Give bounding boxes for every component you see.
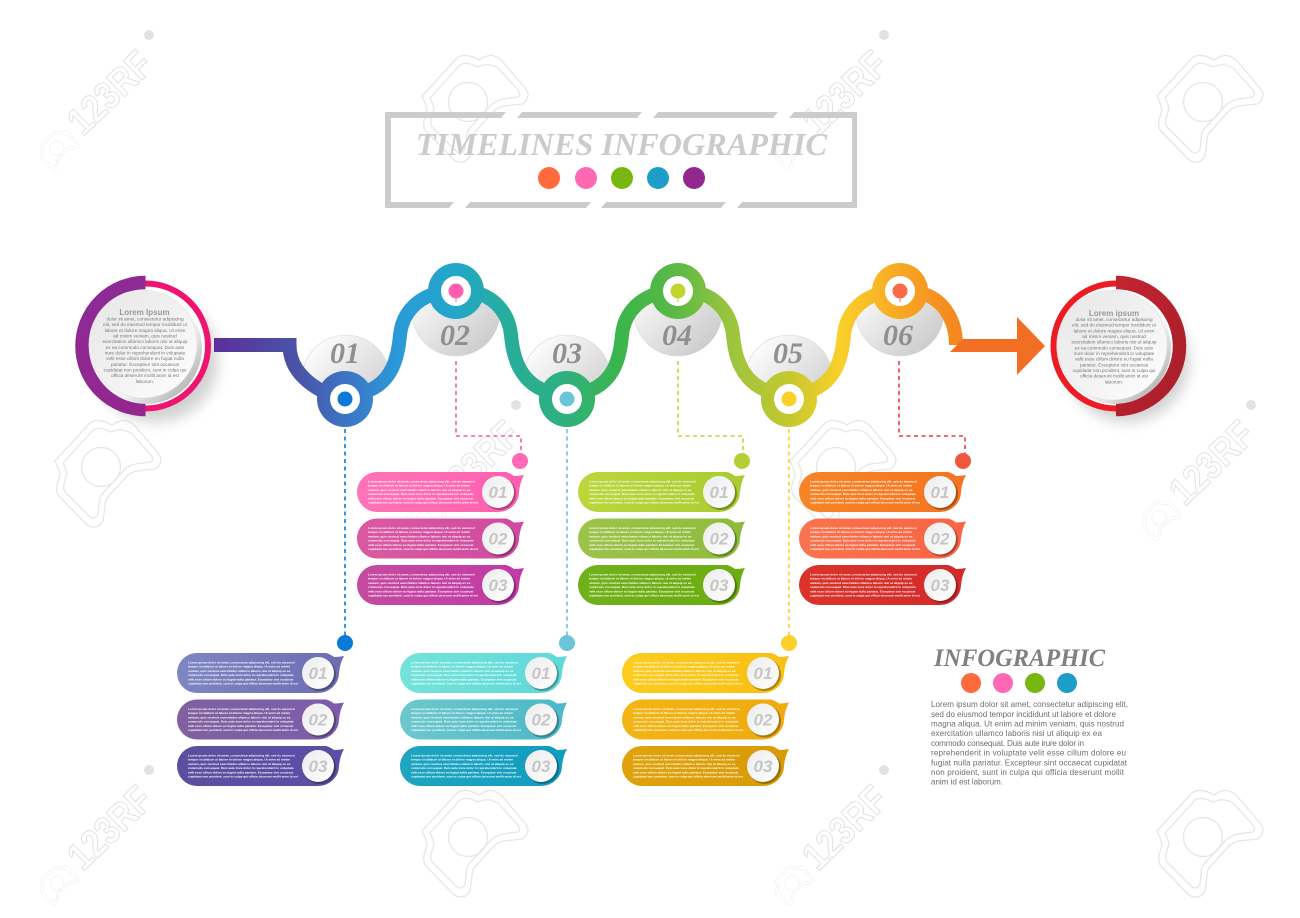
pill group: step 06 orange: veniam, quis nostrud exercitation ullamco laboris nisi ut aliquip ex ea	[810, 534, 913, 538]
pill group: step 04 green: cupidatat non proident, sunt in culpa qui officia deserunt mollit anim id est	[589, 500, 699, 504]
pill group: step 01 purple: commodo consequat. Duis aute irure dolor in reprehenderit in voluptate	[188, 766, 294, 770]
pill group: step 04 green: veniam, quis nostrud exercitation ullamco laboris nisi ut aliquip ex ea	[589, 534, 692, 538]
title colour dots	[538, 167, 705, 189]
infographic body text	[931, 700, 1128, 787]
end circle panel: Lorem ipsum	[1089, 309, 1139, 318]
step numbers	[330, 319, 913, 370]
pill group: step 06 orange: 03	[931, 576, 950, 595]
pill group: step 05 yellow: 01	[754, 664, 772, 683]
start circle panel: Lorem Ipsum	[119, 308, 170, 317]
pill group: step 02 pink: tempor incididunt ut labore et dolore magna aliqua. Ut enim ad minim	[368, 484, 470, 488]
pill group: step 02 pink: velit esse cillum dolore eu fugiat nulla pariatur. Excepteur sint occaecat	[368, 589, 473, 593]
pill group: step 05 yellow: cupidatat non proident, sunt in culpa qui officia deserunt mollit anim id est	[633, 728, 743, 732]
pill group: step 01 purple: Lorem ipsum dolor sit amet, consectetur adipiscing elit, sed do eiusmod	[188, 707, 295, 711]
pill group: step 03 teal: Lorem ipsum dolor sit amet, consectetur adipiscing elit, sed do eiusmod	[411, 707, 518, 711]
pill group: step 04 green: Lorem ipsum dolor sit amet, consectetur adipiscing elit, sed do eiusmod	[589, 572, 696, 576]
infographic body text: sed do eiusmod tempor incididunt ut labore et dolore	[931, 710, 1116, 719]
pill group: step 05 yellow: 03	[754, 757, 773, 776]
number discs	[304, 302, 944, 383]
pill group: step 01 purple: cupidatat non proident, sunt in culpa qui officia deserunt mollit anim id est	[188, 728, 298, 732]
pill group: step 03 teal: velit esse cillum dolore eu fugiat nulla pariatur. Excepteur sint occaecat	[411, 677, 516, 681]
start circle panel: labore et dolore magna aliqua. Ut enim	[105, 328, 185, 333]
pill group: step 02 pink: 01	[489, 483, 507, 502]
start circle panel: officia deserunt mollit anim id est	[111, 373, 180, 378]
pill group: step 03 teal: Lorem ipsum dolor sit amet, consectetur adipiscing elit, sed do eiusmod	[411, 754, 518, 758]
pill group: step 03 teal	[400, 653, 567, 786]
pill group: step 04 green: commodo consequat. Duis aute irure dolor in reprehenderit in voluptate	[589, 492, 695, 496]
pill group: step 05 yellow: commodo consequat. Duis aute irure dolor in reprehenderit in voluptate	[633, 673, 739, 677]
timeline nodes	[317, 263, 928, 427]
pill group: step 04 green: veniam, quis nostrud exercitation ullamco laboris nisi ut aliquip ex ea	[589, 581, 692, 585]
pill group: step 03 teal: Lorem ipsum dolor sit amet, consectetur adipiscing elit, sed do eiusmod	[411, 660, 518, 664]
step numbers: 02	[440, 319, 470, 352]
end circle panel: ad minim veniam, quis nostrud	[1082, 334, 1146, 339]
pill group: step 06 orange	[799, 472, 966, 605]
pill group: step 03 teal: 02	[532, 710, 551, 730]
pill group: step 04 green: tempor incididunt ut labore et dolore magna aliqua. Ut enim ad minim	[589, 484, 691, 488]
start circle panel: velit esse cillum dolore eu fugiat nulla	[106, 356, 184, 361]
pill group: step 01 purple: cupidatat non proident, sunt in culpa qui officia deserunt mollit anim id est	[188, 682, 298, 686]
start circle panel: ex ea commodo consequat. Duis aute	[106, 345, 185, 350]
pill group: step 02 pink: cupidatat non proident, sunt in culpa qui officia deserunt mollit anim id est	[368, 500, 478, 504]
pill group: step 03 teal: tempor incididunt ut labore et dolore magna aliqua. Ut enim ad minim	[411, 665, 513, 669]
pill group: step 06 orange: tempor incididunt ut labore et dolore magna aliqua. Ut enim ad minim	[810, 577, 912, 581]
pill group: step 06 orange: veniam, quis nostrud exercitation ullamco laboris nisi ut aliquip ex ea	[810, 488, 913, 492]
pill group: step 04 green: commodo consequat. Duis aute irure dolor in reprehenderit in voluptate	[589, 539, 695, 543]
pill group: step 06 orange: velit esse cillum dolore eu fugiat nulla pariatur. Excepteur sint occaecat	[810, 543, 915, 547]
pill group: step 02 pink: veniam, quis nostrud exercitation ullamco laboris nisi ut aliquip ex ea	[368, 488, 471, 492]
title: TIMELINES INFOGRAPHIC	[416, 126, 828, 162]
pill group: step 02 pink	[357, 472, 524, 605]
start circle panel: dolor sit amet, consectetur adipiscing	[106, 316, 184, 322]
infographic body text: anim id est laborum.	[931, 778, 1003, 787]
pill group: step 06 orange: Lorem ipsum dolor sit amet, consectetur adipiscing elit, sed do eiusmod	[810, 526, 917, 530]
pill group: step 05 yellow: veniam, quis nostrud exercitation ullamco laboris nisi ut aliquip ex ea	[633, 669, 736, 673]
step numbers: 01	[330, 337, 360, 370]
pill group: step 04 green: tempor incididunt ut labore et dolore magna aliqua. Ut enim ad minim	[589, 577, 691, 581]
end circle panel: laborum.	[1105, 379, 1123, 384]
pill group: step 06 orange: 02	[931, 530, 950, 548]
pill group: step 05 yellow: velit esse cillum dolore eu fugiat nulla pariatur. Excepteur sint occaecat	[633, 677, 738, 681]
start circle panel: irure dolor in reprehenderit in voluptate	[105, 351, 186, 356]
pill group: step 02 pink: velit esse cillum dolore eu fugiat nulla pariatur. Excepteur sint occaecat	[368, 543, 473, 547]
pill group: step 05 yellow: commodo consequat. Duis aute irure dolor in reprehenderit in voluptate	[633, 766, 739, 770]
pill group: step 01 purple: tempor incididunt ut labore et dolore magna aliqua. Ut enim ad minim	[188, 758, 290, 762]
pill group: step 05 yellow: tempor incididunt ut labore et dolore magna aliqua. Ut enim ad minim	[633, 665, 735, 669]
pill group: step 06 orange: commodo consequat. Duis aute irure dolor in reprehenderit in voluptate	[810, 492, 916, 496]
pill group: step 03 teal: velit esse cillum dolore eu fugiat nulla pariatur. Excepteur sint occaecat	[411, 770, 516, 774]
arrow	[950, 317, 1045, 375]
pill group: step 04 green: 03	[710, 576, 729, 595]
start circle panel	[82, 282, 218, 422]
pill group: step 03 teal: veniam, quis nostrud exercitation ullamco laboris nisi ut aliquip ex ea	[411, 669, 514, 673]
pill group: step 06 orange: commodo consequat. Duis aute irure dolor in reprehenderit in voluptate	[810, 539, 916, 543]
pill group: step 05 yellow: cupidatat non proident, sunt in culpa qui officia deserunt mollit anim id est	[633, 682, 743, 686]
end circle panel: cupidatat non proident, sunt in culpa qui	[1073, 368, 1155, 373]
start circle panel: cupidatat non proident, sunt in culpa qui	[104, 368, 186, 373]
pill group: step 05 yellow: velit esse cillum dolore eu fugiat nulla pariatur. Excepteur sint occaecat	[633, 724, 738, 728]
step numbers: 04	[662, 319, 692, 352]
pill group: step 01 purple: veniam, quis nostrud exercitation ullamco laboris nisi ut aliquip ex ea	[188, 762, 291, 766]
pill group: step 02 pink: veniam, quis nostrud exercitation ullamco laboris nisi ut aliquip ex ea	[368, 534, 471, 538]
pill group: step 03 teal: cupidatat non proident, sunt in culpa qui officia deserunt mollit anim id est	[411, 728, 521, 732]
pill group: step 03 teal: veniam, quis nostrud exercitation ullamco laboris nisi ut aliquip ex ea	[411, 762, 514, 766]
pill group: step 06 orange: velit esse cillum dolore eu fugiat nulla pariatur. Excepteur sint occaecat	[810, 496, 915, 500]
pill group: step 04 green	[578, 472, 745, 605]
pill group: step 03 teal: tempor incididunt ut labore et dolore magna aliqua. Ut enim ad minim	[411, 711, 513, 715]
pill group: step 04 green: Lorem ipsum dolor sit amet, consectetur adipiscing elit, sed do eiusmod	[589, 526, 696, 530]
start circle panel: elit, sed do eiusmod tempor incididunt ut	[103, 322, 188, 327]
step numbers: 03	[552, 337, 582, 370]
infographic body text: exercitation ullamco laboris nisi ut aliquip ex ea	[931, 729, 1102, 738]
pill group: step 02 pink: Lorem ipsum dolor sit amet, consectetur adipiscing elit, sed do eiusmod	[368, 480, 475, 484]
pill group: step 02 pink: commodo consequat. Duis aute irure dolor in reprehenderit in voluptate	[368, 492, 474, 496]
step numbers: 05	[773, 337, 803, 370]
pill group: step 05 yellow: commodo consequat. Duis aute irure dolor in reprehenderit in voluptate	[633, 720, 739, 724]
end circle panel: dolor sit amet, consectetur adipiscing	[1075, 317, 1153, 322]
infographic body text: Lorem ipsum dolor sit amet, consectetur adipiscing elit,	[931, 700, 1128, 709]
end circle panel: velit esse cillum dolore eu fugiat nulla	[1075, 357, 1153, 362]
pill group: step 04 green: tempor incididunt ut labore et dolore magna aliqua. Ut enim ad minim	[589, 530, 691, 534]
wavy timeline	[214, 294, 956, 391]
pill group: step 03 teal: tempor incididunt ut labore et dolore magna aliqua. Ut enim ad minim	[411, 758, 513, 762]
pill group: step 05 yellow: velit esse cillum dolore eu fugiat nulla pariatur. Excepteur sint occaecat	[633, 770, 738, 774]
pill group: step 01 purple: 02	[309, 710, 328, 730]
pill group: step 04 green: cupidatat non proident, sunt in culpa qui officia deserunt mollit anim id est	[589, 547, 699, 551]
pill group: step 01 purple: cupidatat non proident, sunt in culpa qui officia deserunt mollit anim id est	[188, 774, 298, 778]
end circle panel	[1054, 282, 1189, 422]
pill group: step 04 green: velit esse cillum dolore eu fugiat nulla pariatur. Excepteur sint occaecat	[589, 589, 694, 593]
pill group: step 06 orange: veniam, quis nostrud exercitation ullamco laboris nisi ut aliquip ex ea	[810, 581, 913, 585]
end circle panel: irure dolor in reprehenderit in voluptate	[1074, 351, 1155, 356]
pill group: step 04 green: veniam, quis nostrud exercitation ullamco laboris nisi ut aliquip ex ea	[589, 488, 692, 492]
end circle panel: labore et dolore magna aliqua. Ut enim	[1074, 328, 1154, 333]
pill group: step 05 yellow	[622, 653, 789, 786]
pill group: step 06 orange: velit esse cillum dolore eu fugiat nulla pariatur. Excepteur sint occaecat	[810, 589, 915, 593]
infographic body text: commodo consequat. Duis aute irure dolor in	[931, 739, 1084, 748]
pill group: step 06 orange: cupidatat non proident, sunt in culpa qui officia deserunt mollit anim id est	[810, 547, 920, 551]
start circle panel: ad minim veniam, quis nostrud	[113, 334, 177, 339]
pill group: step 06 orange: cupidatat non proident, sunt in culpa qui officia deserunt mollit anim id est	[810, 594, 920, 598]
pill group: step 05 yellow: tempor incididunt ut labore et dolore magna aliqua. Ut enim ad minim	[633, 758, 735, 762]
infographic heading: INFOGRAPHIC	[933, 645, 1105, 672]
pill group: step 01 purple	[177, 653, 344, 786]
pill group: step 01 purple: commodo consequat. Duis aute irure dolor in reprehenderit in voluptate	[188, 673, 294, 677]
pill group: step 06 orange: tempor incididunt ut labore et dolore magna aliqua. Ut enim ad minim	[810, 484, 912, 488]
title frame	[385, 112, 857, 208]
pill group: step 06 orange: tempor incididunt ut labore et dolore magna aliqua. Ut enim ad minim	[810, 530, 912, 534]
pill group: step 06 orange: commodo consequat. Duis aute irure dolor in reprehenderit in voluptate	[810, 585, 916, 589]
pill group: step 05 yellow: cupidatat non proident, sunt in culpa qui officia deserunt mollit anim id est	[633, 774, 743, 778]
pill group: step 04 green: cupidatat non proident, sunt in culpa qui officia deserunt mollit anim id est	[589, 594, 699, 598]
pill group: step 05 yellow: tempor incididunt ut labore et dolore magna aliqua. Ut enim ad minim	[633, 711, 735, 715]
pill group: step 01 purple: 03	[309, 757, 328, 776]
pill group: step 02 pink: Lorem ipsum dolor sit amet, consectetur adipiscing elit, sed do eiusmod	[368, 526, 475, 530]
pill group: step 02 pink: veniam, quis nostrud exercitation ullamco laboris nisi ut aliquip ex ea	[368, 581, 471, 585]
pill group: step 04 green: 02	[710, 530, 729, 548]
pill group: step 01 purple: tempor incididunt ut labore et dolore magna aliqua. Ut enim ad minim	[188, 711, 290, 715]
pill group: step 01 purple: tempor incididunt ut labore et dolore magna aliqua. Ut enim ad minim	[188, 665, 290, 669]
pill group: step 01 purple: velit esse cillum dolore eu fugiat nulla pariatur. Excepteur sint occaecat	[188, 677, 293, 681]
pill group: step 06 orange: 01	[931, 483, 949, 502]
dashed connectors	[337, 361, 971, 651]
infographic body text: reprehenderit in voluptate velit esse cillum dolore eu	[931, 749, 1126, 758]
start circle panel: exercitation ullamco laboris nisi ut aliquip	[103, 339, 188, 344]
pill group: step 02 pink: cupidatat non proident, sunt in culpa qui officia deserunt mollit anim id est	[368, 594, 478, 598]
pill group: step 03 teal: cupidatat non proident, sunt in culpa qui officia deserunt mollit anim id est	[411, 682, 521, 686]
pill group: step 05 yellow: veniam, quis nostrud exercitation ullamco laboris nisi ut aliquip ex ea	[633, 715, 736, 719]
end circle panel: ex ea commodo consequat. Duis aute	[1075, 345, 1154, 350]
pill group: step 06 orange: Lorem ipsum dolor sit amet, consectetur adipiscing elit, sed do eiusmod	[810, 480, 917, 484]
end circle panel: officia deserunt mollit anim id est	[1080, 374, 1149, 379]
pill group: step 03 teal: veniam, quis nostrud exercitation ullamco laboris nisi ut aliquip ex ea	[411, 715, 514, 719]
pill group: step 03 teal: cupidatat non proident, sunt in culpa qui officia deserunt mollit anim id est	[411, 774, 521, 778]
pill group: step 05 yellow: Lorem ipsum dolor sit amet, consectetur adipiscing elit, sed do eiusmod	[633, 660, 740, 664]
pill group: step 02 pink: Lorem ipsum dolor sit amet, consectetur adipiscing elit, sed do eiusmod	[368, 572, 475, 576]
pill group: step 03 teal: commodo consequat. Duis aute irure dolor in reprehenderit in voluptate	[411, 766, 517, 770]
start circle panel: pariatur. Excepteur sint occaecat	[111, 362, 180, 367]
infographic body text: non proident, sunt in culpa qui officia deserunt mollit	[931, 768, 1125, 777]
infographic colour dots	[961, 673, 1077, 693]
end circle panel: elit, sed do eiusmod tempor incididunt ut	[1072, 323, 1157, 328]
pill group: step 02 pink: 02	[489, 530, 508, 548]
pill group: step 03 teal: velit esse cillum dolore eu fugiat nulla pariatur. Excepteur sint occaecat	[411, 724, 516, 728]
end circle panel: exercitation ullamco laboris nisi ut aliquip	[1072, 340, 1157, 345]
infographic body text: fugiat nulla pariatur. Excepteur sint occaecat cupidatat	[931, 758, 1128, 767]
pill group: step 01 purple: veniam, quis nostrud exercitation ullamco laboris nisi ut aliquip ex ea	[188, 669, 291, 673]
pill group: step 03 teal: 01	[532, 664, 550, 683]
end circle panel: pariatur. Excepteur sint occaecat	[1080, 362, 1149, 367]
pill group: step 03 teal: commodo consequat. Duis aute irure dolor in reprehenderit in voluptate	[411, 720, 517, 724]
pill group: step 04 green: velit esse cillum dolore eu fugiat nulla pariatur. Excepteur sint occaecat	[589, 543, 694, 547]
pill group: step 01 purple: veniam, quis nostrud exercitation ullamco laboris nisi ut aliquip ex ea	[188, 715, 291, 719]
pill group: step 02 pink: velit esse cillum dolore eu fugiat nulla pariatur. Excepteur sint occaecat	[368, 496, 473, 500]
pill group: step 02 pink: commodo consequat. Duis aute irure dolor in reprehenderit in voluptate	[368, 585, 474, 589]
pill group: step 05 yellow: Lorem ipsum dolor sit amet, consectetur adipiscing elit, sed do eiusmod	[633, 754, 740, 758]
pill group: step 02 pink: cupidatat non proident, sunt in culpa qui officia deserunt mollit anim id est	[368, 547, 478, 551]
pill group: step 02 pink: tempor incididunt ut labore et dolore magna aliqua. Ut enim ad minim	[368, 577, 470, 581]
pill group: step 01 purple: velit esse cillum dolore eu fugiat nulla pariatur. Excepteur sint occaecat	[188, 770, 293, 774]
pill group: step 01 purple: Lorem ipsum dolor sit amet, consectetur adipiscing elit, sed do eiusmod	[188, 660, 295, 664]
pill group: step 04 green: 01	[710, 483, 728, 502]
start circle panel: laborum.	[136, 379, 154, 384]
pill group: step 03 teal: commodo consequat. Duis aute irure dolor in reprehenderit in voluptate	[411, 673, 517, 677]
pill group: step 04 green: Lorem ipsum dolor sit amet, consectetur adipiscing elit, sed do eiusmod	[589, 480, 696, 484]
pill group: step 05 yellow: Lorem ipsum dolor sit amet, consectetur adipiscing elit, sed do eiusmod	[633, 707, 740, 711]
pill group: step 06 orange: cupidatat non proident, sunt in culpa qui officia deserunt mollit anim id est	[810, 500, 920, 504]
pill group: step 01 purple: velit esse cillum dolore eu fugiat nulla pariatur. Excepteur sint occaecat	[188, 724, 293, 728]
pill group: step 06 orange: Lorem ipsum dolor sit amet, consectetur adipiscing elit, sed do eiusmod	[810, 572, 917, 576]
pill group: step 05 yellow: veniam, quis nostrud exercitation ullamco laboris nisi ut aliquip ex ea	[633, 762, 736, 766]
pill group: step 02 pink: 03	[489, 576, 508, 595]
pill group: step 04 green: velit esse cillum dolore eu fugiat nulla pariatur. Excepteur sint occaecat	[589, 496, 694, 500]
pill group: step 02 pink: commodo consequat. Duis aute irure dolor in reprehenderit in voluptate	[368, 539, 474, 543]
pill group: step 01 purple: commodo consequat. Duis aute irure dolor in reprehenderit in voluptate	[188, 720, 294, 724]
pill group: step 02 pink: tempor incididunt ut labore et dolore magna aliqua. Ut enim ad minim	[368, 530, 470, 534]
pill group: step 03 teal: 03	[532, 757, 551, 776]
pill group: step 04 green: commodo consequat. Duis aute irure dolor in reprehenderit in voluptate	[589, 585, 695, 589]
pill group: step 01 purple: Lorem ipsum dolor sit amet, consectetur adipiscing elit, sed do eiusmod	[188, 754, 295, 758]
pill group: step 05 yellow: 02	[754, 710, 773, 730]
infographic body text: magna aliqua. Ut enim ad minim veniam, quis nostrud	[931, 720, 1124, 728]
pill group: step 01 purple: 01	[309, 664, 327, 683]
step numbers: 06	[883, 319, 913, 352]
